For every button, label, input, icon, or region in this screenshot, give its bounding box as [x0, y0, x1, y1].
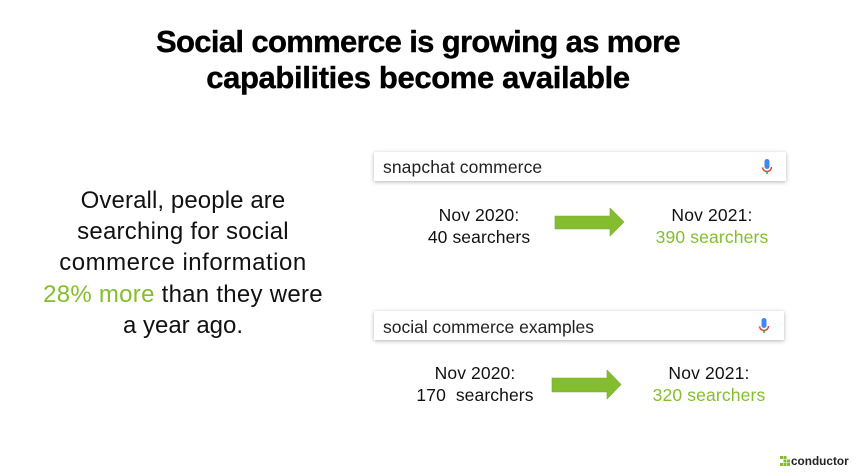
arrow: examples growth [552, 370, 622, 400]
arrow: snapchat growth [554, 208, 624, 237]
title: capabilities become available [206, 60, 630, 95]
stat: examples Nov 2020 [416, 363, 534, 405]
stat: examples Nov 2021: 320 searchers [653, 385, 765, 405]
search bar: social commerce examples [374, 311, 784, 340]
search query: social commerce examples [383, 317, 594, 337]
stat: snapchat Nov 2020: Nov 2020: [439, 205, 519, 225]
text block: overall summary: commerce information [59, 249, 307, 276]
search query: snapchat commerce [383, 157, 542, 177]
stat: snapchat Nov 2020 [428, 205, 530, 247]
text block: overall summary [43, 187, 323, 339]
stat: examples Nov 2020: Nov 2020: [435, 363, 515, 383]
text block: overall summary: searching for social [77, 218, 289, 245]
icon: conductor mark [780, 456, 790, 466]
icon: microphone [758, 318, 770, 333]
text block: overall summary: 28% more than they were [43, 281, 323, 308]
stat: snapchat Nov 2020: 40 searchers [428, 227, 530, 247]
text block: overall summary: Overall, people are [81, 187, 285, 214]
search bar: snapchat commerce [374, 152, 786, 181]
stat: snapchat Nov 2021 [656, 205, 768, 247]
stat: snapchat Nov 2021: 390 searchers [656, 227, 768, 247]
title [156, 24, 680, 95]
logo: conductor [780, 454, 849, 468]
title: Social commerce is growing as more [156, 24, 680, 59]
stat: snapchat Nov 2021: Nov 2021: [671, 205, 753, 225]
stat: examples Nov 2020: 170 searchers [416, 385, 534, 405]
wordmark: conductor [791, 454, 849, 468]
stat: examples Nov 2021: Nov 2021: [668, 363, 750, 383]
text block: overall summary: a year ago. [123, 312, 243, 339]
stat: examples Nov 2021 [653, 363, 765, 405]
icon: microphone [762, 159, 772, 174]
